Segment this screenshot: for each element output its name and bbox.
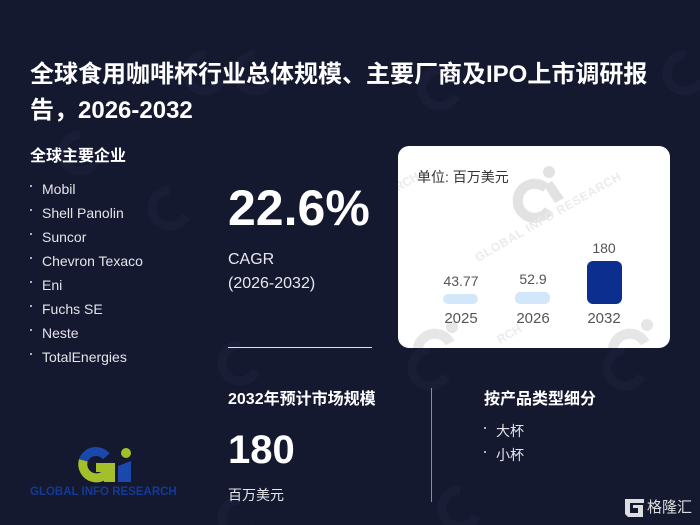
market size heading: 2032年预计市场规模 — [228, 391, 376, 408]
company list: Fuchs SE — [42, 301, 103, 317]
heading: product segments: 按产品类型细分 — [484, 391, 596, 408]
company list: Mobil — [42, 181, 75, 197]
segment list — [484, 423, 524, 463]
panel: product segments — [484, 390, 596, 463]
CAGR label — [228, 251, 315, 292]
company list — [30, 181, 143, 365]
CAGR label: (2026-2032) — [228, 275, 315, 292]
logo: Global Info Research — [30, 447, 177, 498]
logo text: 格隆汇 — [647, 499, 692, 516]
segment list: 小杯 — [496, 447, 524, 463]
company list: Neste — [42, 325, 79, 341]
market size unit: 百万美元 — [228, 487, 284, 503]
value 2032: 180 — [592, 240, 616, 256]
axis label 2026: 2026 — [516, 310, 550, 327]
company list: Suncor — [42, 229, 86, 245]
company list: Eni — [42, 277, 62, 293]
company list: TotalEnergies — [42, 349, 127, 365]
segment list: 大杯 — [496, 423, 524, 439]
CAGR label: CAGR — [228, 251, 274, 268]
axis label 2032: 2032 — [587, 310, 621, 327]
market size value: 180 — [228, 428, 295, 472]
bar 2032 — [587, 261, 622, 304]
bar 2026 — [515, 292, 550, 304]
company list: Chevron Texaco — [42, 253, 143, 269]
card watermark: GLOBAL INFO RESEARCH — [472, 169, 623, 265]
CAGR value: 22.6% — [228, 180, 370, 236]
card watermark: RCH — [494, 321, 524, 347]
company list: Shell Panolin — [42, 205, 124, 221]
bar 2025 — [443, 294, 478, 304]
logo wordmark: GLOBAL INFO RESEARCH — [30, 486, 177, 498]
unit label: 单位: 百万美元 — [417, 169, 509, 185]
panel: key companies — [30, 147, 143, 365]
panel: bar chart card — [398, 146, 670, 348]
value 2025: 43.77 — [443, 273, 479, 289]
card watermark — [398, 166, 653, 348]
value 2026: 52.9 — [519, 271, 547, 287]
logo: Gelonghui — [625, 499, 692, 517]
bar chart — [443, 240, 622, 327]
heading: key companies: 全球主要企业 — [30, 148, 126, 165]
axis label 2025: 2025 — [444, 310, 478, 327]
title: 全球食用咖啡杯行业总体规模、主要厂商及IPO上市调研报告，2026-2032 — [30, 61, 647, 124]
